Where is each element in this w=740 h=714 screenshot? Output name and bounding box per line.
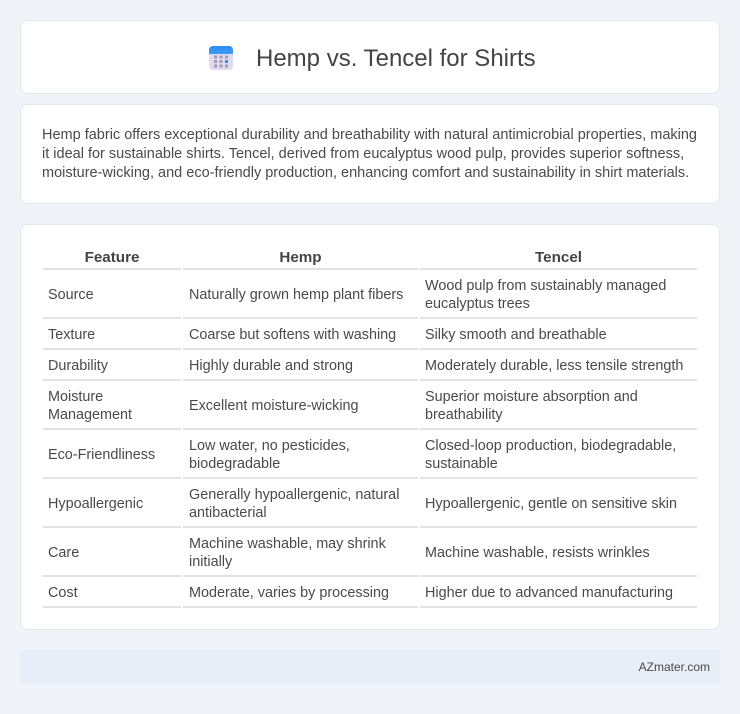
row: durability [43,358,697,381]
row: moisture management: Moisture [48,389,103,405]
row: cost: Cost [48,585,78,601]
header row [43,249,697,270]
row: eco-friendliness [43,438,697,479]
row: eco-friendliness: sustainable [425,456,498,472]
title: Hemp vs. Tencel for Shirts [256,45,536,72]
comparison table [43,249,697,608]
row: eco-friendliness: Closed-loop production, biodegradable, [425,438,676,454]
row: eco-friendliness: biodegradable [189,456,280,472]
row: eco-friendliness: Low water, no pesticides, [189,438,350,454]
row: moisture management: Excellent moisture-wicking [189,398,359,414]
row: source: Source [48,287,94,303]
row: hypoallergenic: Generally hypoallergenic, natural [189,487,399,503]
row: care [43,536,697,577]
row: durability: Highly durable and strong [189,358,353,374]
row: care: initially [189,554,232,570]
footer bar [20,650,720,684]
summary paragraph: it ideal for sustainable shirts. Tencel, derived from eucalyptus wood pulp, provides superior softness, [42,146,684,162]
row: cost: Moderate, varies by processing [189,585,389,601]
row: care: Machine washable, may shrink [189,536,386,552]
row: moisture management: breathability [425,407,503,423]
panel: summary text [20,104,720,204]
row: texture: Texture [48,327,95,343]
row: texture [43,327,697,350]
row: hypoallergenic: antibacterial [189,505,267,521]
row: care: Care [48,545,79,561]
row: moisture management [43,389,697,430]
row: source: Wood pulp from sustainably managed [425,278,666,294]
row: durability: Durability [48,358,108,374]
row: care: Machine washable, resists wrinkles [425,545,650,561]
header row: Hemp [279,249,322,266]
row: eco-friendliness: Eco-Friendliness [48,447,155,463]
panel: title card [20,20,720,94]
row: cost [43,585,697,608]
row: cost: Higher due to advanced manufacturing [425,585,673,601]
row: texture: Silky smooth and breathable [425,327,607,343]
header row: Tencel [535,249,582,266]
row: source: Naturally grown hemp plant fibers [189,287,403,303]
row: source: eucalyptus trees [425,296,530,312]
summary paragraph: Hemp fabric offers exceptional durability and breathability with natural antimicrobial properties, making [42,127,697,143]
header row: Feature [85,249,139,266]
footer credit: AZmater.com [639,660,710,674]
row: moisture management: Management [48,407,132,423]
row: texture: Coarse but softens with washing [189,327,396,343]
row: hypoallergenic [43,487,697,528]
summary paragraph [42,127,697,181]
row: moisture management: Superior moisture absorption and [425,389,638,405]
row: hypoallergenic: Hypoallergenic [48,496,143,512]
row: source [43,278,697,319]
row: durability: Moderately durable, less tensile strength [425,358,683,374]
panel: comparison table [20,224,720,630]
summary paragraph: moisture-wicking, and eco-friendly production, enhancing comfort and sustainability in shirt materials. [42,165,689,181]
row: hypoallergenic: Hypoallergenic, gentle on sensitive skin [425,496,677,512]
icon: calendar [209,46,233,70]
